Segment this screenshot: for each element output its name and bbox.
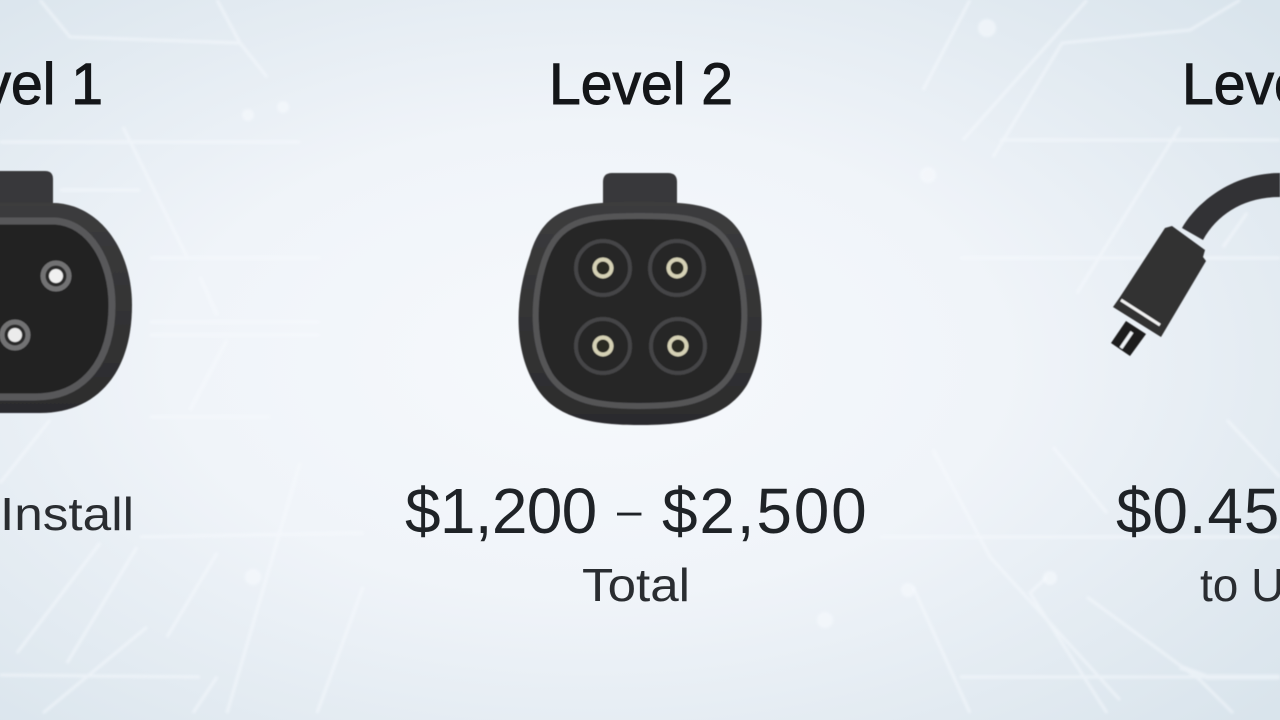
icon: Level 3 plug and cable bbox=[1111, 173, 1280, 356]
price: Level 2: – bbox=[617, 486, 642, 535]
price: Level 3: $0.45 bbox=[1116, 475, 1280, 547]
label: Install: Install bbox=[0, 488, 134, 540]
icon: Level 2 connector bbox=[519, 173, 762, 425]
price: Level 2: $2,500 bbox=[662, 475, 869, 547]
socket: top left bbox=[576, 241, 630, 295]
socket: bottom left bbox=[576, 319, 630, 373]
column: Level 1 bbox=[0, 52, 134, 540]
price: Level 2: $1,200 bbox=[405, 475, 597, 547]
socket: bottom right bbox=[651, 319, 705, 373]
label: Total: Total bbox=[582, 559, 690, 611]
column: Level 3 bbox=[1111, 52, 1280, 611]
icon: Level 1 connector bbox=[0, 171, 132, 413]
circuit nodes bbox=[242, 19, 1057, 628]
heading: Level 2: Level 2 bbox=[549, 52, 733, 117]
column: Level 2 bbox=[405, 52, 869, 611]
socket: top right bbox=[650, 241, 704, 295]
